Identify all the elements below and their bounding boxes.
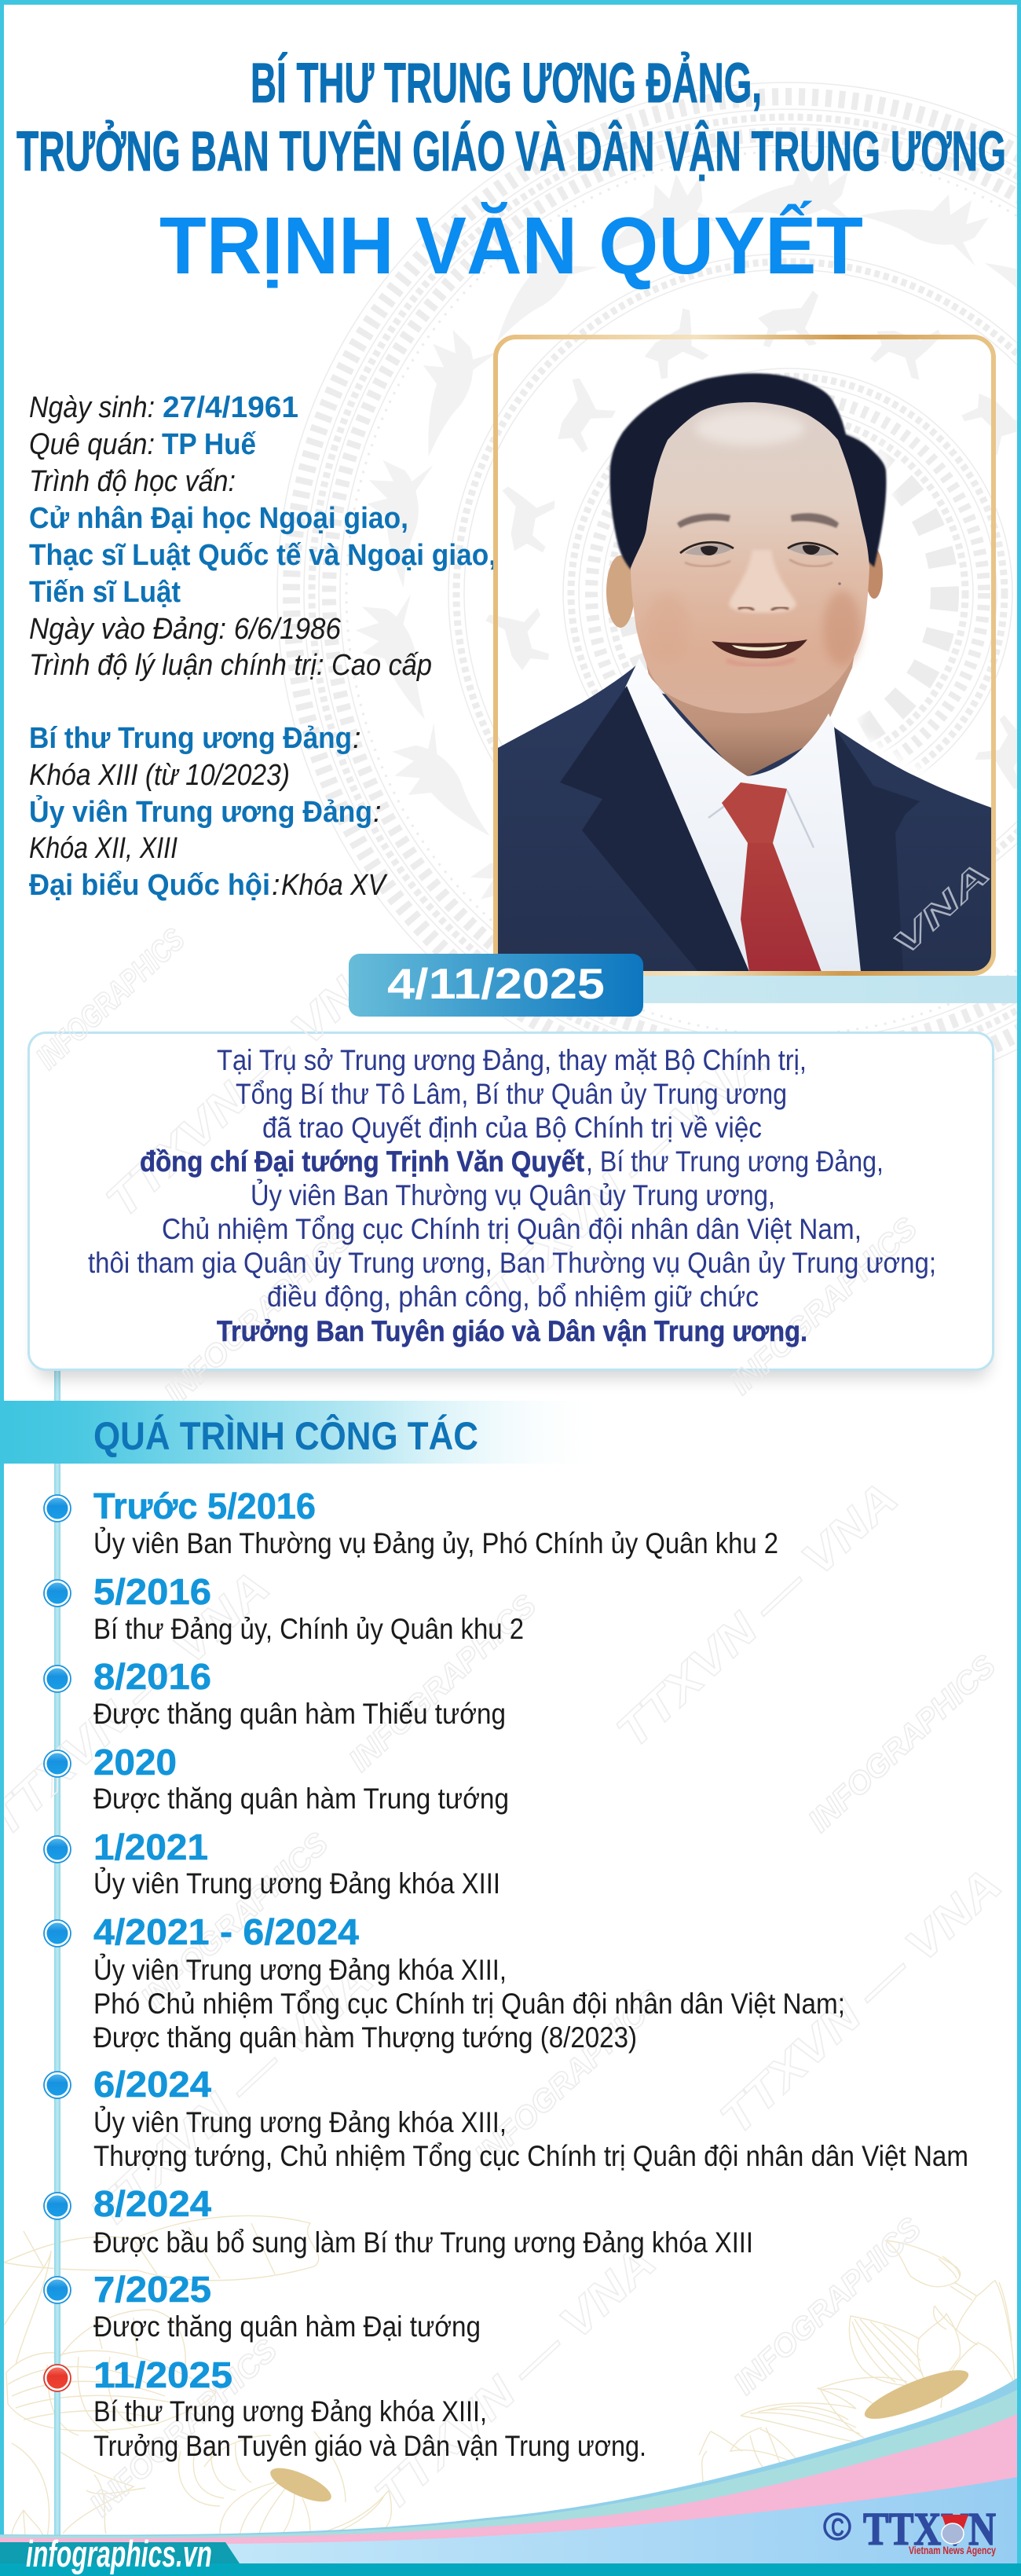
lotus seed pod: left — [266, 2461, 335, 2508]
soft halo behind portrait — [836, 453, 927, 777]
forehead highlight — [695, 411, 805, 445]
panel: personal details: Khóa XV — [281, 869, 388, 902]
section band — [4, 1401, 609, 1464]
watermarks — [0, 922, 1011, 2523]
decision text: Trưởng Ban Tuyên giáo và Dân vận Trung ương. — [217, 1315, 807, 1347]
eyebrows — [677, 513, 839, 528]
timeline: 4/2021 - 6/2024 — [44, 1911, 845, 2054]
watermarks: INFOGRAPHICS — [158, 1221, 359, 1412]
decision text: đã trao Quyết định của Bộ Chính trị về việc — [262, 1112, 762, 1144]
timeline: 7/2025: 7/2025 — [93, 2269, 211, 2310]
timeline: 7/2025: Được thăng quân hàm Đại tướng — [93, 2310, 481, 2343]
lower lip — [726, 658, 795, 665]
watermarks: INFOGRAPHICS — [468, 1983, 669, 2174]
timeline: 4/2021 - 6/2024: 4/2021 - 6/2024 — [93, 1911, 359, 1952]
timeline: 5/2016: Bí thư Đảng ủy, Chính ủy Quân khu 2 — [93, 1613, 524, 1645]
decorative bronze drum pattern — [277, 82, 1021, 1104]
eye whites — [685, 544, 836, 555]
panel: personal details: Khóa XIII (từ 10/2023) — [29, 759, 290, 792]
timeline: 8/2024 — [44, 2183, 753, 2259]
panel: personal details: Bí thư Trung ương Đảng — [29, 722, 352, 755]
timeline: 2020: Được thăng quân hàm Trung tướng — [93, 1783, 509, 1815]
decision text: Tại Trụ sở Trung ương Đảng, thay mặt Bộ Chính trị, — [217, 1044, 807, 1076]
decision text: Chủ nhiệm Tổng cục Chính trị Quân đội nhân dân Việt Nam, — [162, 1213, 862, 1245]
timeline: 8/2016: Được thăng quân hàm Thiếu tướng — [93, 1698, 506, 1730]
date badge — [349, 954, 643, 1017]
lotus decoration: right — [699, 2241, 1015, 2486]
panel: personal details: Tiến sĩ Luật — [29, 576, 181, 609]
photo watermark: VNA — [887, 856, 997, 962]
portrait photo — [498, 373, 1013, 972]
timeline: Trước 5/2016 — [44, 1486, 778, 1559]
mouth — [712, 639, 807, 658]
right cheek shading — [823, 591, 861, 666]
panel: personal details: Ngày vào Đảng: 6/6/1986 — [29, 613, 342, 646]
copyright mark: C — [831, 2513, 844, 2541]
timeline: 4/2021 - 6/2024: Ủy viên Trung ương Đảng khóa XIII, — [93, 1953, 507, 1986]
timeline: 5/2016: 5/2016 — [93, 1571, 211, 1612]
date ribbon strip — [640, 976, 1017, 1003]
under-eye lines — [685, 559, 833, 566]
panel: personal details: Trình độ lý luận chính trị: Cao cấp — [29, 649, 432, 682]
tie blade — [741, 843, 822, 972]
panel: personal details: Ủy viên Trung ương Đảng — [29, 794, 372, 829]
panel: personal details: : — [373, 796, 382, 829]
title — [16, 53, 1006, 291]
panel: decision card — [28, 1032, 993, 1370]
timeline: 6/2024 — [44, 2064, 968, 2172]
watermarks: INFOGRAPHICS — [802, 1648, 1003, 1839]
timeline: 1/2021: Ủy viên Trung ương Đảng khóa XIII — [93, 1867, 500, 1900]
watermarks: TTXVN — VNA — [365, 2236, 665, 2522]
hair — [610, 373, 886, 570]
tie knot — [722, 782, 787, 843]
nostrils — [738, 607, 789, 610]
ears — [606, 555, 635, 628]
panel: personal details: Ngày sinh: — [29, 391, 155, 424]
timeline: 8/2024: Được bầu bổ sung làm Bí thư Trung ương Đảng khóa XIII — [93, 2226, 753, 2259]
footer tab — [0, 2542, 240, 2563]
teeth — [732, 644, 787, 650]
watermarks: INFOGRAPHICS — [83, 2332, 284, 2523]
title: TRỊNH VĂN QUYẾT — [159, 200, 863, 291]
eyelid lines — [680, 542, 838, 555]
decision text: thôi tham gia Quân ủy Trung ương, Ban Thường vụ Quân ủy Trung ương; — [88, 1247, 936, 1279]
timeline: 6/2024: Ủy viên Trung ương Đảng khóa XIII, — [93, 2105, 507, 2138]
timeline: 11/2025: Bí thư Trung ương Đảng khóa XIII, — [93, 2395, 487, 2428]
panel: personal details: : — [353, 722, 361, 755]
date badge: 4/11/2025 — [387, 959, 605, 1008]
timeline: 4/2021 - 6/2024: Được thăng quân hàm Thượng tướng (8/2023) — [93, 2021, 637, 2054]
mole — [838, 582, 841, 585]
panel: personal details: TP Huế — [162, 428, 257, 461]
cheek shading — [655, 598, 681, 619]
watermarks: INFOGRAPHICS — [30, 922, 192, 1076]
timeline: 11/2025: Trưởng Ban Tuyên giáo và Dân vận Trung ương. — [93, 2430, 646, 2462]
lotus seed pod: right — [860, 2362, 973, 2428]
footer bar — [0, 2563, 1021, 2576]
panel: personal details: Quê quán: — [29, 428, 155, 461]
neck — [646, 657, 854, 776]
panel: personal details: Đại biểu Quốc hội — [29, 869, 270, 902]
section heading: QUÁ TRÌNH CÔNG TÁC — [93, 1413, 478, 1458]
timeline: 8/2016: 8/2016 — [93, 1656, 211, 1697]
timeline: 2020 — [44, 1742, 509, 1815]
panel: personal details: Trình độ học vấn: — [29, 465, 236, 498]
decision text: đồng chí Đại tướng Trịnh Văn Quyết — [140, 1145, 584, 1178]
card shadow — [35, 1045, 990, 1379]
lotus decoration: left — [4, 2215, 391, 2538]
timeline: 1/2021 — [44, 1827, 500, 1900]
watermarks: TTXVN — VNA — [711, 1859, 1011, 2145]
watermarks: TTXVN — VNA — [97, 942, 397, 1228]
panel: personal details: 27/4/1961 — [163, 391, 298, 424]
timeline vertical line — [54, 1370, 60, 2542]
timeline: 11/2025: 11/2025 — [93, 2354, 232, 2395]
decision text — [88, 1044, 936, 1347]
panel: personal details: Thạc sĩ Luật Quốc tế và Ngoại giao, — [29, 539, 496, 572]
watermarks: INFOGRAPHICS — [727, 2211, 928, 2402]
left lapel — [560, 686, 749, 972]
watermarks: INFOGRAPHICS — [134, 1826, 335, 2017]
timeline: 6/2024: 6/2024 — [93, 2064, 211, 2105]
timeline: Trước 5/2016: Trước 5/2016 — [93, 1486, 316, 1526]
right lapel — [834, 727, 920, 972]
footer waves — [0, 2378, 1017, 2576]
nose — [729, 550, 796, 613]
iris — [701, 545, 820, 555]
timeline: 8/2016 — [44, 1656, 506, 1730]
timeline: 4/2021 - 6/2024: Phó Chủ nhiệm Tổng cục Chính trị Quân đội nhân dân Việt Nam; — [93, 1988, 845, 2020]
timeline: 11/2025 — [44, 2354, 646, 2462]
website label: infographics.vn — [26, 2533, 212, 2574]
panel: personal details: : — [272, 869, 280, 902]
watermarks: TTXVN — VNA — [607, 1472, 907, 1758]
timeline: 5/2016 — [44, 1571, 524, 1645]
decision text: , Bí thư Trung ương Đảng, — [586, 1145, 884, 1178]
decision text: Ủy viên Ban Thường vụ Quân ủy Trung ương, — [251, 1178, 775, 1211]
watermarks: INFOGRAPHICS — [342, 1588, 543, 1779]
timeline: 1/2021: 1/2021 — [93, 1827, 208, 1867]
face — [631, 402, 869, 713]
timeline: 7/2025 — [44, 2269, 481, 2343]
decision text: Tổng Bí thư Tô Lâm, Bí thư Quân ủy Trung ương — [236, 1078, 787, 1110]
timeline: 2020: 2020 — [93, 1742, 177, 1783]
timeline: Trước 5/2016: Ủy viên Ban Thường vụ Đảng ủy, Phó Chính ủy Quân khu 2 — [93, 1526, 778, 1559]
TTXVN logo: TTXVN — [863, 2503, 996, 2555]
timeline: 8/2024: 8/2024 — [93, 2183, 211, 2224]
panel: personal details: Khóa XII, XIII — [29, 832, 177, 865]
photo frame — [496, 337, 994, 973]
watermarks: TTXVN — VNA — [82, 1953, 382, 2239]
shirt — [625, 658, 861, 972]
watermarks: TTXVN — VNA — [475, 1034, 775, 1320]
upper lip — [716, 633, 803, 643]
watermarks: INFOGRAPHICS — [723, 1211, 924, 1402]
panel: personal details: Cử nhân Đại học Ngoại giao, — [29, 502, 408, 535]
collar tips shading — [708, 786, 814, 848]
decision text: điều động, phân công, bổ nhiệm giữ chức — [267, 1281, 759, 1313]
suit jacket — [498, 665, 991, 972]
panel: personal details — [29, 391, 496, 902]
title: BÍ THƯ TRUNG ƯƠNG ĐẢNG, — [251, 53, 762, 115]
